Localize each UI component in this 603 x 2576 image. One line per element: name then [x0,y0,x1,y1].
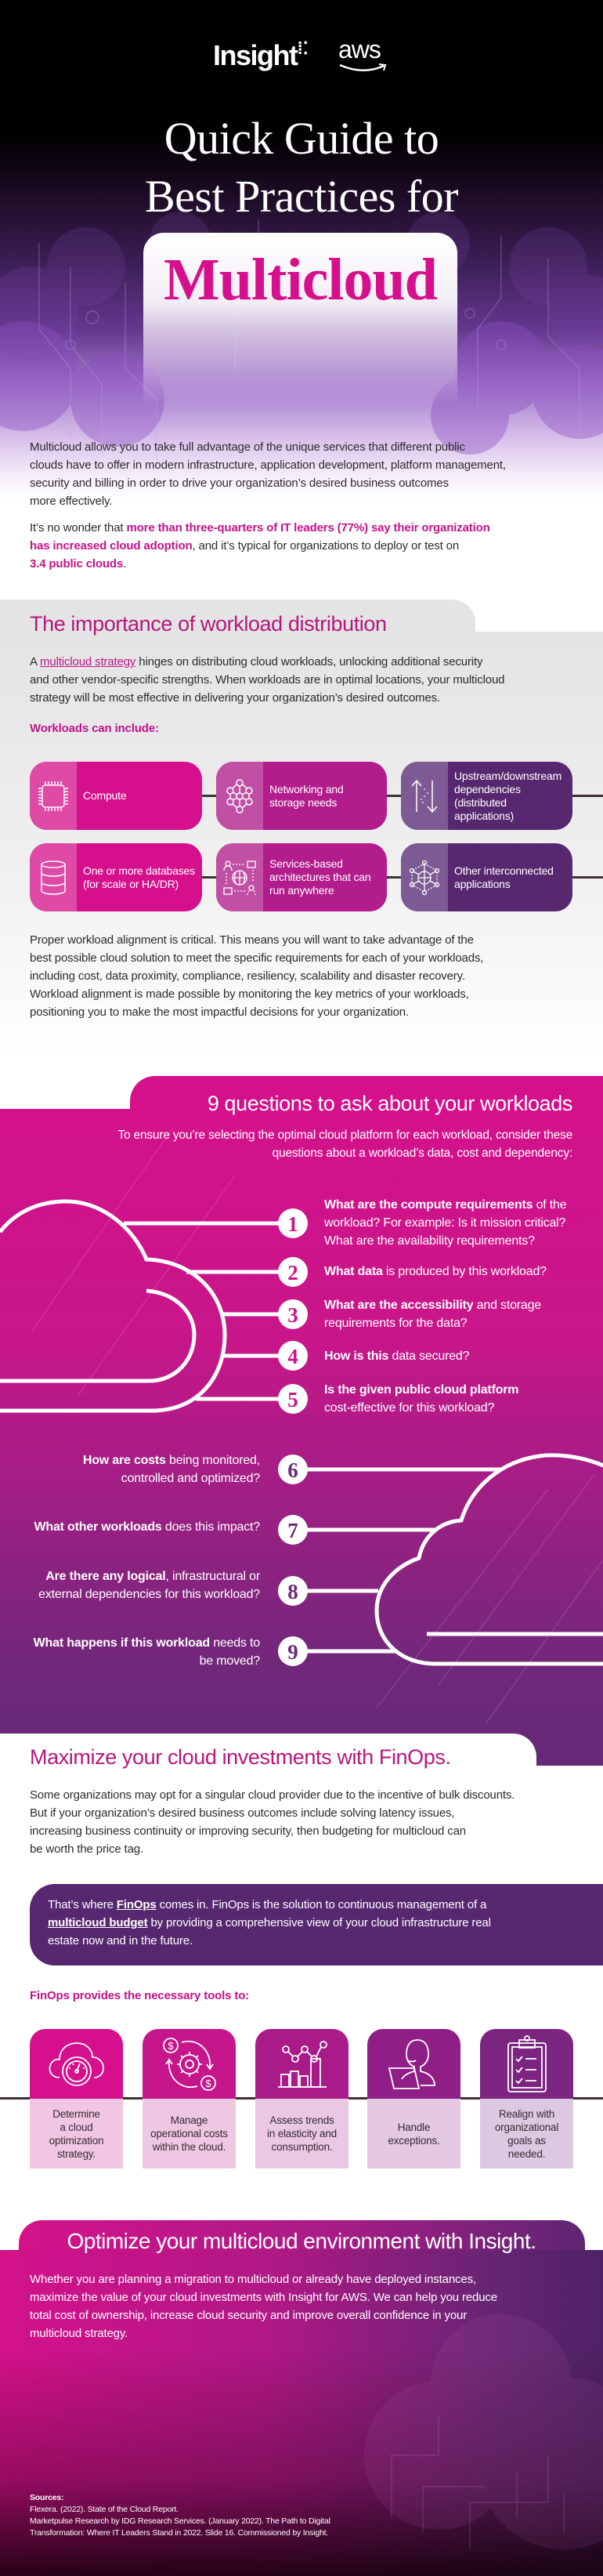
text: proper workload alignment [30,933,483,1019]
question 1 [324,1198,566,1248]
tool: optimization strategy: strategy. [57,2147,96,2160]
card: compute: Compute [83,789,126,802]
tool: optimization strategy: a cloud [60,2121,93,2133]
question 6: How are costs being monitored, [83,1454,260,1467]
text: multicloud strategy: strategy will be most effective in delivering your organization’s desired outcomes. [30,691,440,705]
question 3 [324,1299,541,1330]
text: FinOps intro: be worth the price tag. [30,1842,143,1856]
card: databases: One or more databases [83,864,195,876]
card: interconnected applications: applications [454,878,511,890]
intro text: Multicloud allows you to take full advantage of the unique services that different public [30,440,465,454]
heading: optimize: Optimize your multicloud environment with Insight. [67,2229,536,2253]
tool: operational costs: within the cloud. [153,2141,226,2153]
text: proper workload alignment: Proper workload alignment is critical. This means you will want to take advantage of the [30,933,474,947]
sources: Marketpulse Research by IDG Research Services. (January 2022). The Path to Digital [30,2516,330,2526]
number circles: 9 [287,1640,298,1664]
tool: operational costs: $ [168,2039,174,2052]
sources [30,2493,330,2538]
intro text: security and billing in order to drive your organization’s desired business outcomes [30,476,449,490]
title box: Multicloud [143,233,457,405]
card: networking: Networking and [269,782,343,795]
tool: assess trends: consumption. [272,2141,332,2153]
intro text [30,440,506,508]
number circles: 7 [287,1519,298,1542]
tool: operational costs [143,2029,236,2168]
card: upstream/downstream: (distributed applications) [454,796,514,821]
intro text: more effectively. [30,495,112,508]
number circles: 1 [287,1212,298,1236]
question 2: What data is produced by this workload? [324,1265,547,1278]
number circles: 6 [287,1458,298,1482]
question 3: requirements for the data? [324,1317,467,1330]
card: services-based: run anywhere [269,884,334,897]
tool: assess trends [255,2029,348,2168]
title: Best Practices for [145,171,458,222]
tool: handle exceptions: exceptions. [388,2135,440,2146]
tool: optimization strategy: Determine [52,2108,100,2119]
text: multicloud strategy: and other vendor-specific strengths. When workloads are in optimal locations, your multicloud [30,673,504,687]
question 3: What are the accessibility and storage [324,1299,541,1312]
number circles: 2 [287,1261,298,1284]
stat text: has increased cloud adoption, and it’s typical for organizations to deploy or test on [30,539,459,553]
text: FinOps intro: increasing business continuity or improving security, then budgeting for multicloud can [30,1824,466,1838]
logo: Insight: Insight⁞⁚ [213,38,309,71]
callout: FinOps definition: estate now and in the future. [48,1934,193,1947]
number circles: 5 [287,1388,298,1411]
card: networking: storage needs [269,796,337,809]
logo: aws [338,35,387,71]
question 8: Are there any logical, infrastructural or [45,1570,260,1583]
text: proper workload alignment: including cost, data proximity, compliance, resiliency, scalability and disaster recovery. [30,969,465,983]
question 7: What other workloads does this impact? [34,1520,260,1534]
number circles: 4 [287,1345,298,1368]
text: FinOps intro: Some organizations may opt for a singular cloud provider due to the incentive of bulk discounts. [30,1788,515,1802]
intro text: clouds have to offer in modern infrastructure, application development, platform management, [30,458,506,472]
text: proper workload alignment: positioning you to make the most impactful decisions for your organization. [30,1005,409,1019]
card: databases: (for scale or HA/DR) [83,878,179,890]
card: interconnected applications [401,843,572,911]
heading: 9 questions: 9 questions to ask about your workloads [208,1092,572,1115]
label: FinOps tools: FinOps provides the necessary tools to: [30,1989,249,2002]
white tab: FinOps [0,1734,536,1769]
text: optimize body: maximize the value of your cloud investments with Insight for AWS. We can help you reduce [30,2291,497,2304]
text: proper workload alignment: Workload alignment is made possible by monitoring the key metrics of your workloads, [30,987,469,1001]
tool: optimization strategy: optimization [49,2135,103,2146]
panel: workload distribution background [0,600,603,961]
sources: Sources: [30,2493,63,2502]
heading: importance of workload distribution: The importance of workload distribution [30,612,387,636]
tool: operational costs: $ [205,2077,211,2089]
tool: optimization strategy [30,2029,123,2168]
question 1: What are the availability requirements? [324,1234,535,1248]
stat text: 3.4 public clouds. [30,557,126,571]
tool: realign goals [480,2029,573,2168]
stat text: It’s no wonder that more than three-quarters of IT leaders (77%) say their organization [30,521,490,534]
text: questions intro: questions about a workload’s data, cost and dependency: [273,1147,572,1160]
sources: Transformation: Where IT Leaders Stand in 2022. Slide 16. Commissioned by Insight. [30,2528,328,2538]
label: workloads can include: Workloads can include: [30,722,159,735]
question 6: controlled and optimized? [121,1472,260,1485]
sources: Flexera. (2022). State of the Cloud Report. [30,2505,179,2514]
title: Quick Guide to [164,113,439,164]
left cloud outline [0,1201,282,1411]
tool: realign goals: Realign with [499,2108,554,2119]
tool: realign goals: needed. [508,2147,545,2160]
card: networking [216,762,387,830]
card: upstream/downstream: dependencies [454,782,521,795]
text: questions intro: To ensure you’re selecting the optimal cloud platform for each workload, consider these [117,1129,572,1142]
card: services-based: architectures that can [269,871,370,883]
question 9 [33,1636,260,1668]
question 8 [38,1570,260,1601]
logo: aws: aws [338,35,381,63]
title box: Multicloud: Multicloud [164,247,437,313]
question 5 [324,1383,518,1415]
tool: operational costs: Manage [171,2114,208,2126]
text: FinOps intro: But if your organization’s desired business outcomes include solving latency issues, [30,1806,454,1820]
callout: FinOps definition: multicloud budget by providing a comprehensive view of your cloud infrastructure real [48,1916,491,1929]
card: upstream/downstream [401,762,572,830]
card: interconnected applications: Other interconnected [454,864,554,876]
card: databases [30,843,202,911]
tool: operational costs: operational costs [150,2128,228,2139]
tools line [0,2097,603,2100]
number circles [278,1208,308,1666]
text: FinOps intro [30,1788,515,1856]
number circles: 3 [287,1303,298,1327]
callout: FinOps definition [30,1884,603,1966]
number circles: 8 [287,1580,298,1603]
text: optimize body: Whether you are planning a migration to multicloud or already have deployed instances, [30,2273,476,2286]
question 9: be moved? [200,1654,260,1668]
question 9: What happens if this workload needs to [34,1636,260,1650]
question 8: external dependencies for this workload? [38,1588,260,1601]
question 5: Is the given public cloud platform [324,1383,518,1397]
question 4: How is this data secured? [324,1350,469,1363]
text: multicloud strategy [30,655,504,705]
heading: FinOps: Maximize your cloud investments with FinOps. [30,1745,451,1769]
text: multicloud strategy: A multicloud strategy hinges on distributing cloud workloads, unlocking additional security [30,655,482,668]
title [145,113,459,222]
tool: assess trends: in elasticity and [267,2128,337,2139]
question 1: workload? For example: Is it mission critical? [324,1216,565,1230]
question 5: cost-effective for this workload? [324,1401,494,1415]
hero background [0,0,603,502]
callout: FinOps definition: That’s where FinOps comes in. FinOps is the solution to continuous management of a [48,1898,486,1911]
text: optimize body: total cost of ownership, increase cloud security and improve overall confidence in your [30,2309,467,2322]
card: upstream/downstream: Upstream/downstream [454,770,561,782]
question 6 [83,1454,260,1485]
tool: handle exceptions [367,2029,460,2168]
connector lines [202,795,603,797]
text: optimize body: multicloud strategy. [30,2327,128,2340]
panel: optimize with Insight [0,2220,603,2576]
stat text [30,521,490,571]
tool: realign goals: goals as [507,2135,546,2146]
right cloud outline [305,1455,603,1664]
text: proper workload alignment: best possible cloud solution to meet the specific requirements for each of your workloads, [30,951,483,965]
panel: 9 questions [0,1076,603,1766]
tool: handle exceptions: Handle [398,2121,430,2133]
card: services-based [216,843,387,911]
text: questions intro [117,1129,572,1160]
question 1: What are the compute requirements of the [324,1198,566,1212]
tool: realign goals: organizational [495,2121,558,2133]
card: services-based: Services-based [269,857,343,870]
tool: assess trends: Assess trends [269,2114,334,2126]
card: compute [30,762,202,830]
text: optimize body [30,2273,497,2340]
